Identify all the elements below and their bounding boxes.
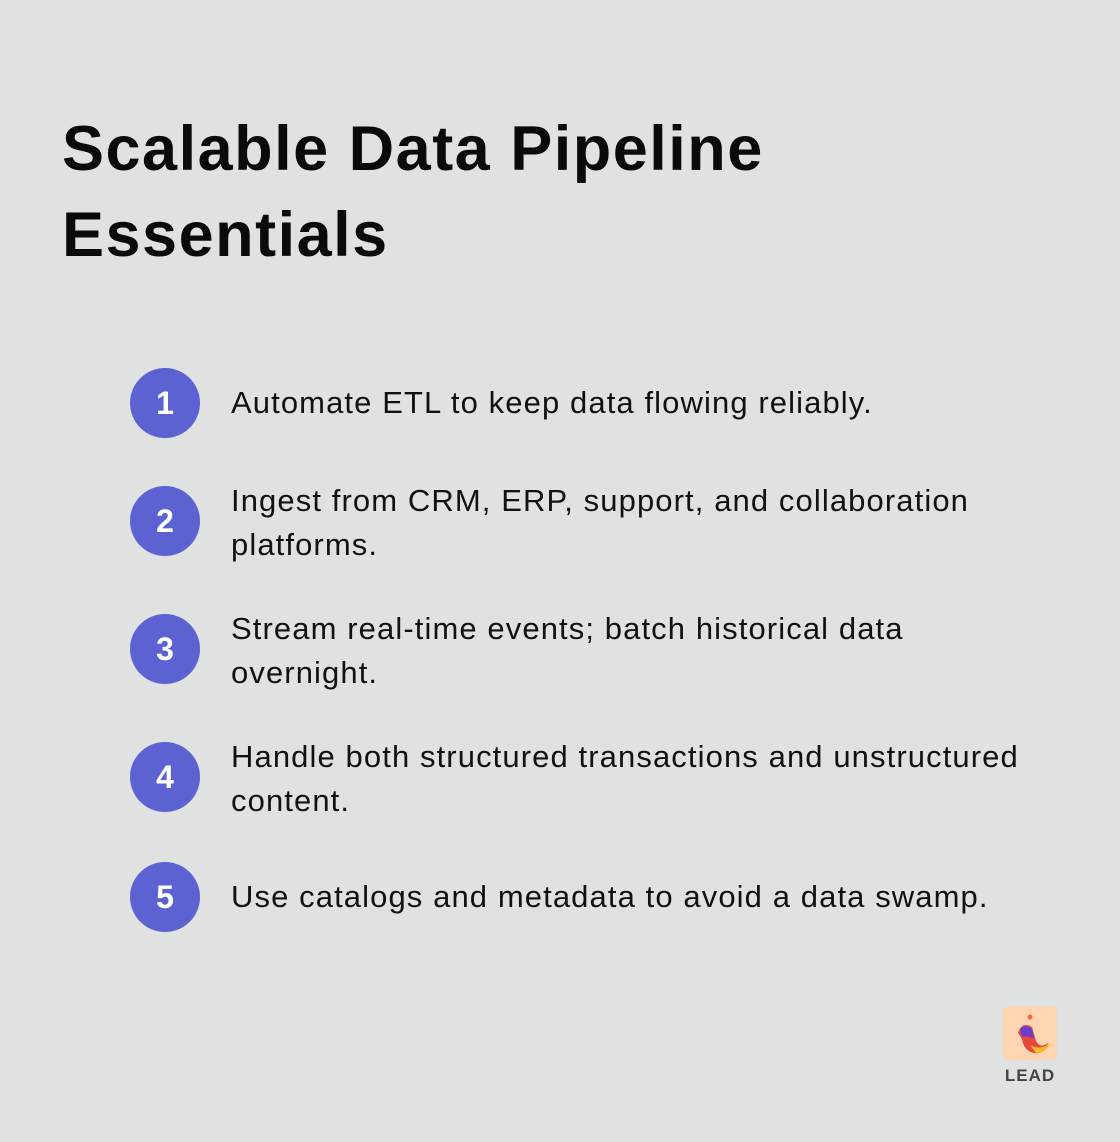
item 1: Automate ETL to keep data flowing reliably. bbox=[231, 385, 873, 420]
item 5 bbox=[130, 862, 989, 932]
item 5: Use catalogs and metadata to avoid a data swamp. bbox=[231, 879, 989, 914]
title: Essentials bbox=[62, 200, 389, 270]
logo: LEAD bbox=[1005, 1066, 1055, 1085]
item 4: Handle both structured transactions and unstructured bbox=[231, 739, 1019, 774]
title: Scalable Data Pipeline bbox=[62, 114, 764, 184]
item 4: 4 bbox=[156, 759, 174, 795]
item 3: overnight. bbox=[231, 655, 378, 690]
item 2: 2 bbox=[156, 503, 174, 539]
item 4: content. bbox=[231, 783, 350, 818]
item 5: 5 bbox=[156, 879, 174, 915]
title bbox=[62, 114, 764, 270]
item 2: Ingest from CRM, ERP, support, and collaboration bbox=[231, 483, 969, 518]
logo bbox=[1003, 1006, 1057, 1085]
item 2 bbox=[130, 483, 969, 562]
item 1 bbox=[130, 368, 873, 438]
item 2: platforms. bbox=[231, 527, 378, 562]
item 3: 3 bbox=[156, 631, 174, 667]
item 3: Stream real-time events; batch historical data bbox=[231, 611, 904, 646]
item 4 bbox=[130, 739, 1019, 818]
item 1: 1 bbox=[156, 385, 174, 421]
item 3 bbox=[130, 611, 904, 690]
